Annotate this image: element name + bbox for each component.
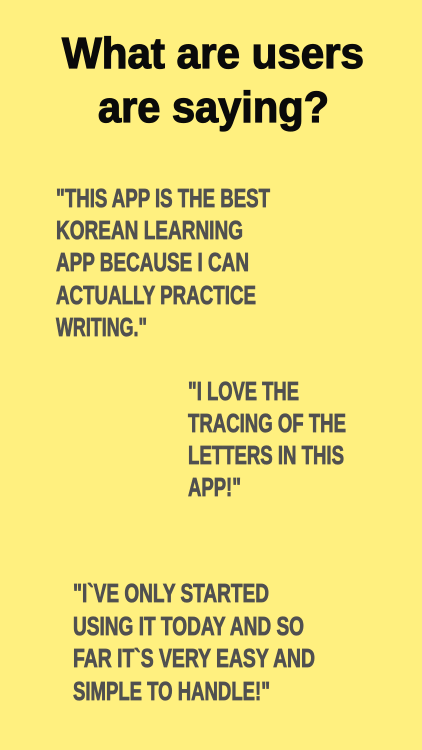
quote: love the tracing: "I LOVE THE [188,378,299,406]
quote: best Korean learning app: KOREAN LEARNING [56,217,243,245]
title: are saying? [98,83,329,132]
quote: best Korean learning app: WRITING." [56,314,147,342]
quote: love the tracing: TRACING OF THE [188,410,346,438]
quote: easy and simple to handle: SIMPLE TO HANDLE!" [73,678,270,706]
quote: best Korean learning app: APP BECAUSE I CAN [56,249,249,277]
title [62,29,364,132]
quote: best Korean learning app: ACTUALLY PRACTICE [56,282,256,310]
quote: love the tracing: LETTERS IN THIS [188,442,344,470]
quote: easy and simple to handle [73,580,315,706]
quote: easy and simple to handle: FAR IT`S VERY EASY AND [73,645,315,673]
quote: easy and simple to handle: USING IT TODAY AND SO [73,613,304,641]
quote: love the tracing [188,378,346,502]
quote: love the tracing: APP!" [188,474,241,502]
title: What are users [62,29,364,78]
quote: easy and simple to handle: "I`VE ONLY STARTED [73,580,269,608]
quote: best Korean learning app: "THIS APP IS THE BEST [56,185,270,213]
quote: best Korean learning app [56,185,270,342]
